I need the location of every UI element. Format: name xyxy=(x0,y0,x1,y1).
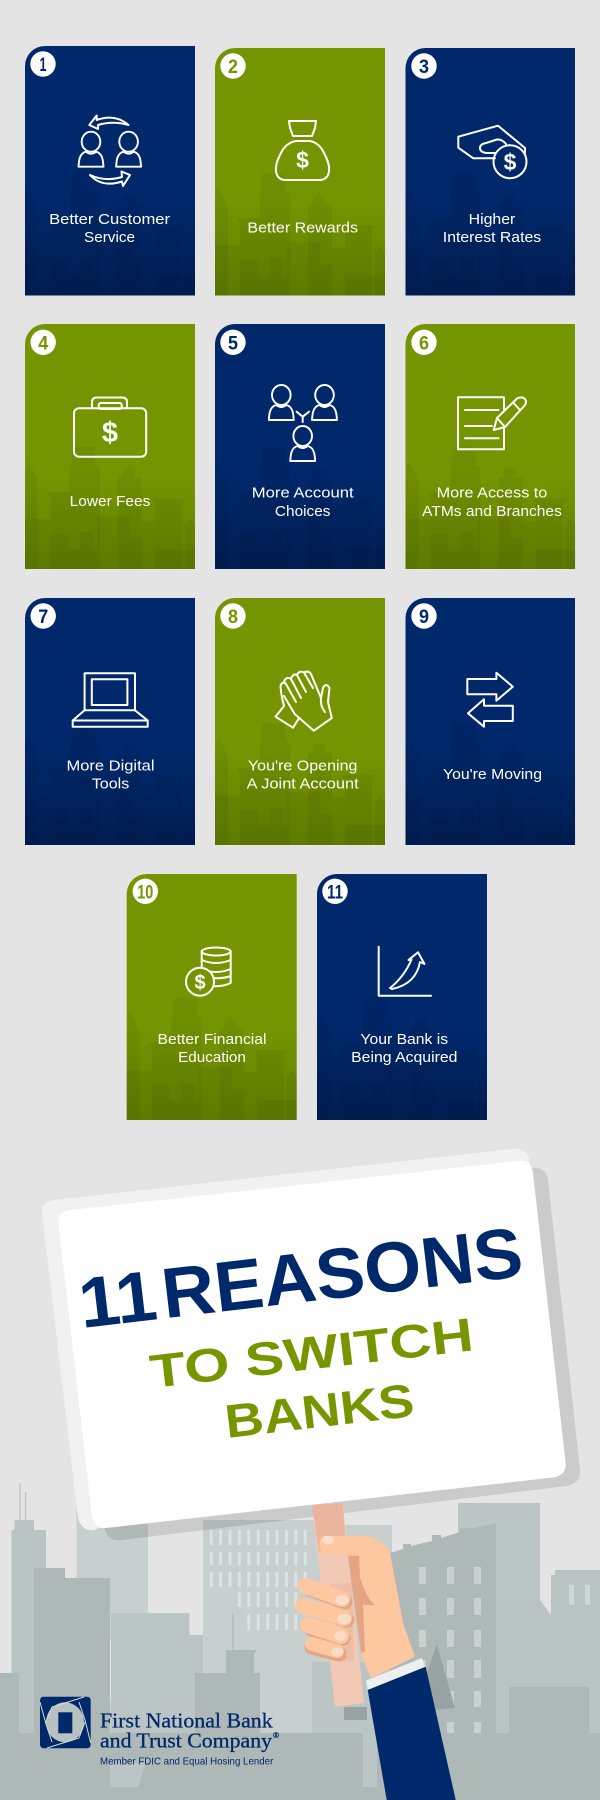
icon: coin stack: $ xyxy=(194,972,206,994)
panel: reason 2: Better Rewards xyxy=(247,220,358,237)
shirt cuff xyxy=(366,1658,425,1690)
icon: hand dropping coin xyxy=(458,126,526,178)
panel: reason 8: You're Opening xyxy=(248,757,357,774)
panel: reason 5: Choices xyxy=(275,503,330,520)
hand xyxy=(303,1536,415,1678)
panel: reason 5: More Account xyxy=(252,484,355,501)
panel: reason 4: Lower Fees xyxy=(70,493,150,510)
panel: reason 9: You're Moving xyxy=(443,766,542,783)
panel: reason 10: Education xyxy=(178,1049,246,1066)
panel: reason 8: 8 xyxy=(228,607,238,628)
suit sleeve xyxy=(368,1667,456,1800)
bank logo: Member FDIC and Equal Hosing Lender xyxy=(100,1755,274,1767)
sign handle xyxy=(312,1503,364,1707)
panel: reason 6: ATMs and Branches xyxy=(422,503,562,520)
bank logo: and Trust Company xyxy=(100,1728,272,1752)
panel: reason 1: Service xyxy=(84,229,135,246)
panel: reason 7: 7 xyxy=(38,607,48,628)
icon: two opposing arrows xyxy=(467,673,513,727)
panel: reason 8 xyxy=(215,598,385,845)
panel: reason 6 xyxy=(406,324,576,569)
panel: reason 7 xyxy=(25,598,195,845)
panel: reason 9: 9 xyxy=(419,607,429,628)
panel: reason 7: Tools xyxy=(92,775,129,792)
panel: reason 11: 11 xyxy=(327,882,343,903)
panel: reason 3: 3 xyxy=(419,57,429,78)
panel: reason 6: More Access to xyxy=(437,484,547,501)
panel: reason 10: 10 xyxy=(137,882,153,903)
panel: reason 1: Better Customer xyxy=(49,211,170,228)
title xyxy=(75,1213,527,1448)
panel: reason 7: More Digital xyxy=(66,757,154,774)
icon: hand dropping coin: $ xyxy=(504,149,517,175)
title: BANKS xyxy=(222,1373,417,1448)
bank logo xyxy=(40,1697,279,1767)
icon: coin stack xyxy=(186,948,231,996)
panel: reason 11: Your Bank is xyxy=(360,1031,448,1048)
bank logo: First National Bank xyxy=(100,1708,273,1732)
icon: document and pen xyxy=(458,397,526,449)
sign shadow xyxy=(71,1168,580,1540)
panel: reason 9 xyxy=(406,598,576,845)
panel: reason 10: Better Financial xyxy=(158,1031,266,1048)
panel: reason 3 xyxy=(406,48,576,296)
panel: reason 3: Higher xyxy=(469,211,515,228)
panel: reason 2 xyxy=(215,48,385,296)
icon: money bag xyxy=(276,121,329,180)
panel: reason 3: Interest Rates xyxy=(443,229,541,246)
city skyline illustration xyxy=(0,1483,600,1800)
panel: reason 5: 5 xyxy=(228,333,238,354)
title: 11 REASONS xyxy=(75,1213,527,1344)
panel: reason 8: A Joint Account xyxy=(247,775,360,792)
panel: reason 1: 1 xyxy=(40,55,47,76)
panel: reason 11 xyxy=(317,874,487,1120)
logo mark xyxy=(40,1697,91,1748)
icon: high five hands xyxy=(276,672,332,731)
icon: laptop xyxy=(73,673,148,727)
icon: three people connected xyxy=(269,385,337,461)
panel: reason 10 xyxy=(127,874,297,1120)
icon: customer service exchange xyxy=(78,116,141,186)
icon: money bag: $ xyxy=(296,147,309,173)
panel: reason 4 xyxy=(25,324,195,569)
panel: reason 1 xyxy=(25,46,195,296)
sign board xyxy=(42,1149,566,1530)
title: TO SWITCH xyxy=(147,1307,476,1398)
icon: rising chart arrow xyxy=(379,947,431,996)
panel: reason 6: 6 xyxy=(419,333,429,354)
bank logo: ® xyxy=(273,1731,279,1740)
panel: reason 11: Being Acquired xyxy=(351,1049,457,1066)
panel: reason 2: 2 xyxy=(228,57,238,78)
hand holding sign xyxy=(303,1503,456,1800)
panel: reason 5 xyxy=(215,324,385,569)
icon: briefcase with dollar: $ xyxy=(102,417,118,449)
panel: reason 4: 4 xyxy=(38,333,49,354)
icon: briefcase with dollar xyxy=(74,398,146,457)
